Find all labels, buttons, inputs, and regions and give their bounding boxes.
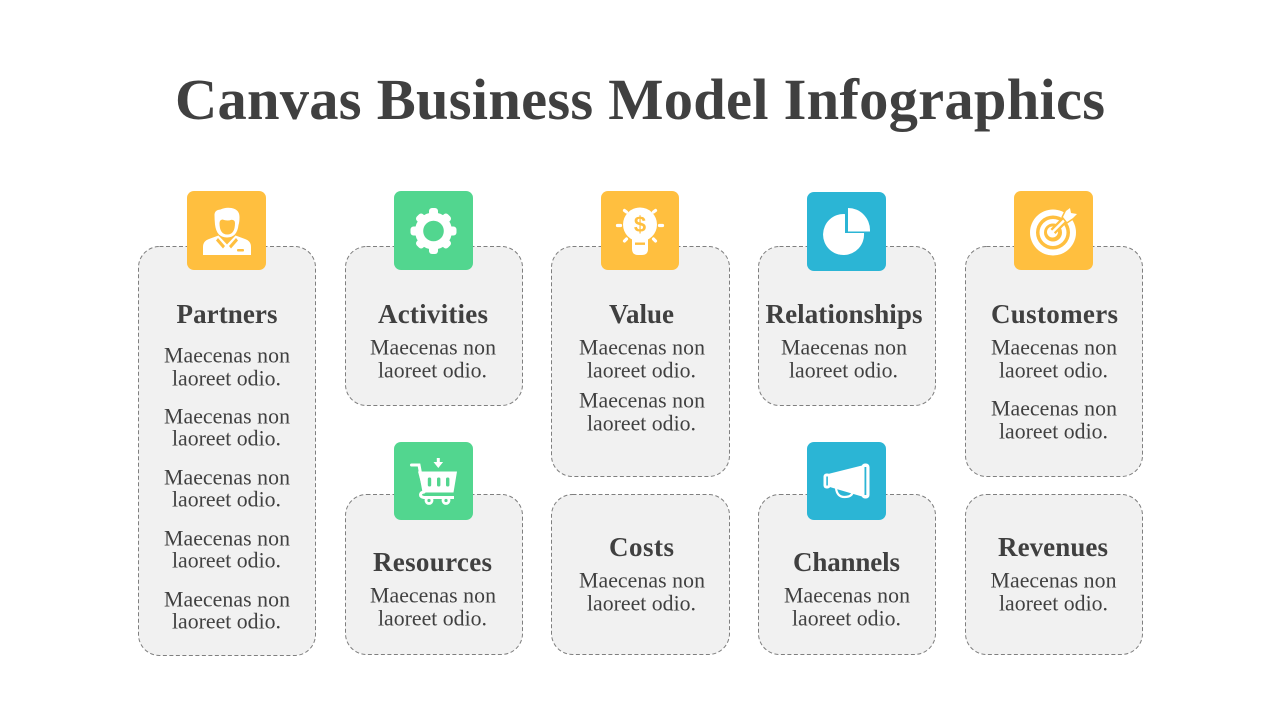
text block: partners: laoreet odio. (172, 549, 281, 573)
panel: relationships (758, 246, 936, 406)
text block: costs: laoreet odio. (587, 592, 696, 616)
text block: value: laoreet odio. (587, 359, 696, 383)
panel: costs (552, 494, 730, 654)
icon: light bulb (601, 191, 679, 270)
text block: customers: Maecenas non (991, 397, 1117, 421)
text block: activities (370, 336, 496, 383)
text block: value (579, 336, 705, 436)
icon: megaphone (807, 442, 886, 520)
text block: partners: laoreet odio. (172, 610, 281, 634)
text block: partners: laoreet odio. (172, 488, 281, 512)
panel: partners (138, 246, 316, 656)
text block: resources (370, 584, 496, 631)
text block: partners: Maecenas non (164, 466, 290, 490)
text block: resources: Maecenas non (370, 584, 496, 608)
icon: resources cart (394, 442, 473, 520)
text block: partners: Maecenas non (164, 405, 290, 429)
icon: target (1014, 191, 1093, 270)
heading: costs: Costs (609, 532, 674, 562)
text block: channels: Maecenas non (784, 584, 910, 608)
text block: customers: laoreet odio. (999, 359, 1108, 383)
text block: revenues: Maecenas non (990, 569, 1117, 593)
icon detail: dollar sign: $ (634, 212, 646, 237)
text block: customers: Maecenas non (991, 336, 1117, 360)
text block: value: Maecenas non (579, 336, 705, 360)
text block: costs: Maecenas non (579, 569, 705, 593)
text block: revenues: laoreet odio. (999, 592, 1108, 616)
text block: customers (991, 336, 1117, 444)
text block: relationships: Maecenas non (781, 336, 907, 360)
text block: revenues (990, 569, 1117, 616)
text block: channels: laoreet odio. (792, 607, 901, 631)
heading: customers: Customers (991, 299, 1118, 329)
text block: relationships (781, 336, 907, 383)
text block: activities: laoreet odio. (378, 359, 487, 383)
text block: channels (784, 584, 910, 631)
text block: partners (164, 344, 290, 634)
text block: partners: laoreet odio. (172, 367, 281, 391)
panel: customers (966, 246, 1142, 476)
heading: revenues: Revenues (998, 532, 1108, 562)
title: Canvas Business Model Infographics (175, 67, 1105, 132)
heading: partners: Partners (176, 299, 278, 329)
heading: resources: Resources (373, 547, 492, 577)
heading: relationships: Relationships (766, 299, 922, 329)
icon: gear (394, 191, 473, 270)
text block: value: laoreet odio. (587, 412, 696, 436)
panel: channels (758, 494, 936, 654)
heading: value: Value (609, 299, 674, 329)
text block: resources: laoreet odio. (378, 607, 487, 631)
text block: partners: Maecenas non (164, 344, 290, 368)
text block: activities: Maecenas non (370, 336, 496, 360)
text block: partners: Maecenas non (164, 588, 290, 612)
panel: activities (346, 246, 522, 406)
text block: partners: laoreet odio. (172, 427, 281, 451)
text block: value: Maecenas non (579, 389, 705, 413)
text block: partners: Maecenas non (164, 527, 290, 551)
panel: value (552, 246, 730, 476)
icon: pie chart (807, 192, 886, 271)
text block: costs (579, 569, 705, 616)
icon: person (187, 191, 266, 270)
heading: channels: Channels (793, 547, 900, 577)
text block: relationships: laoreet odio. (789, 359, 898, 383)
panel: resources (346, 494, 522, 654)
text block: customers: laoreet odio. (999, 420, 1108, 444)
panel: revenues (966, 494, 1142, 654)
heading: activities: Activities (378, 299, 488, 329)
